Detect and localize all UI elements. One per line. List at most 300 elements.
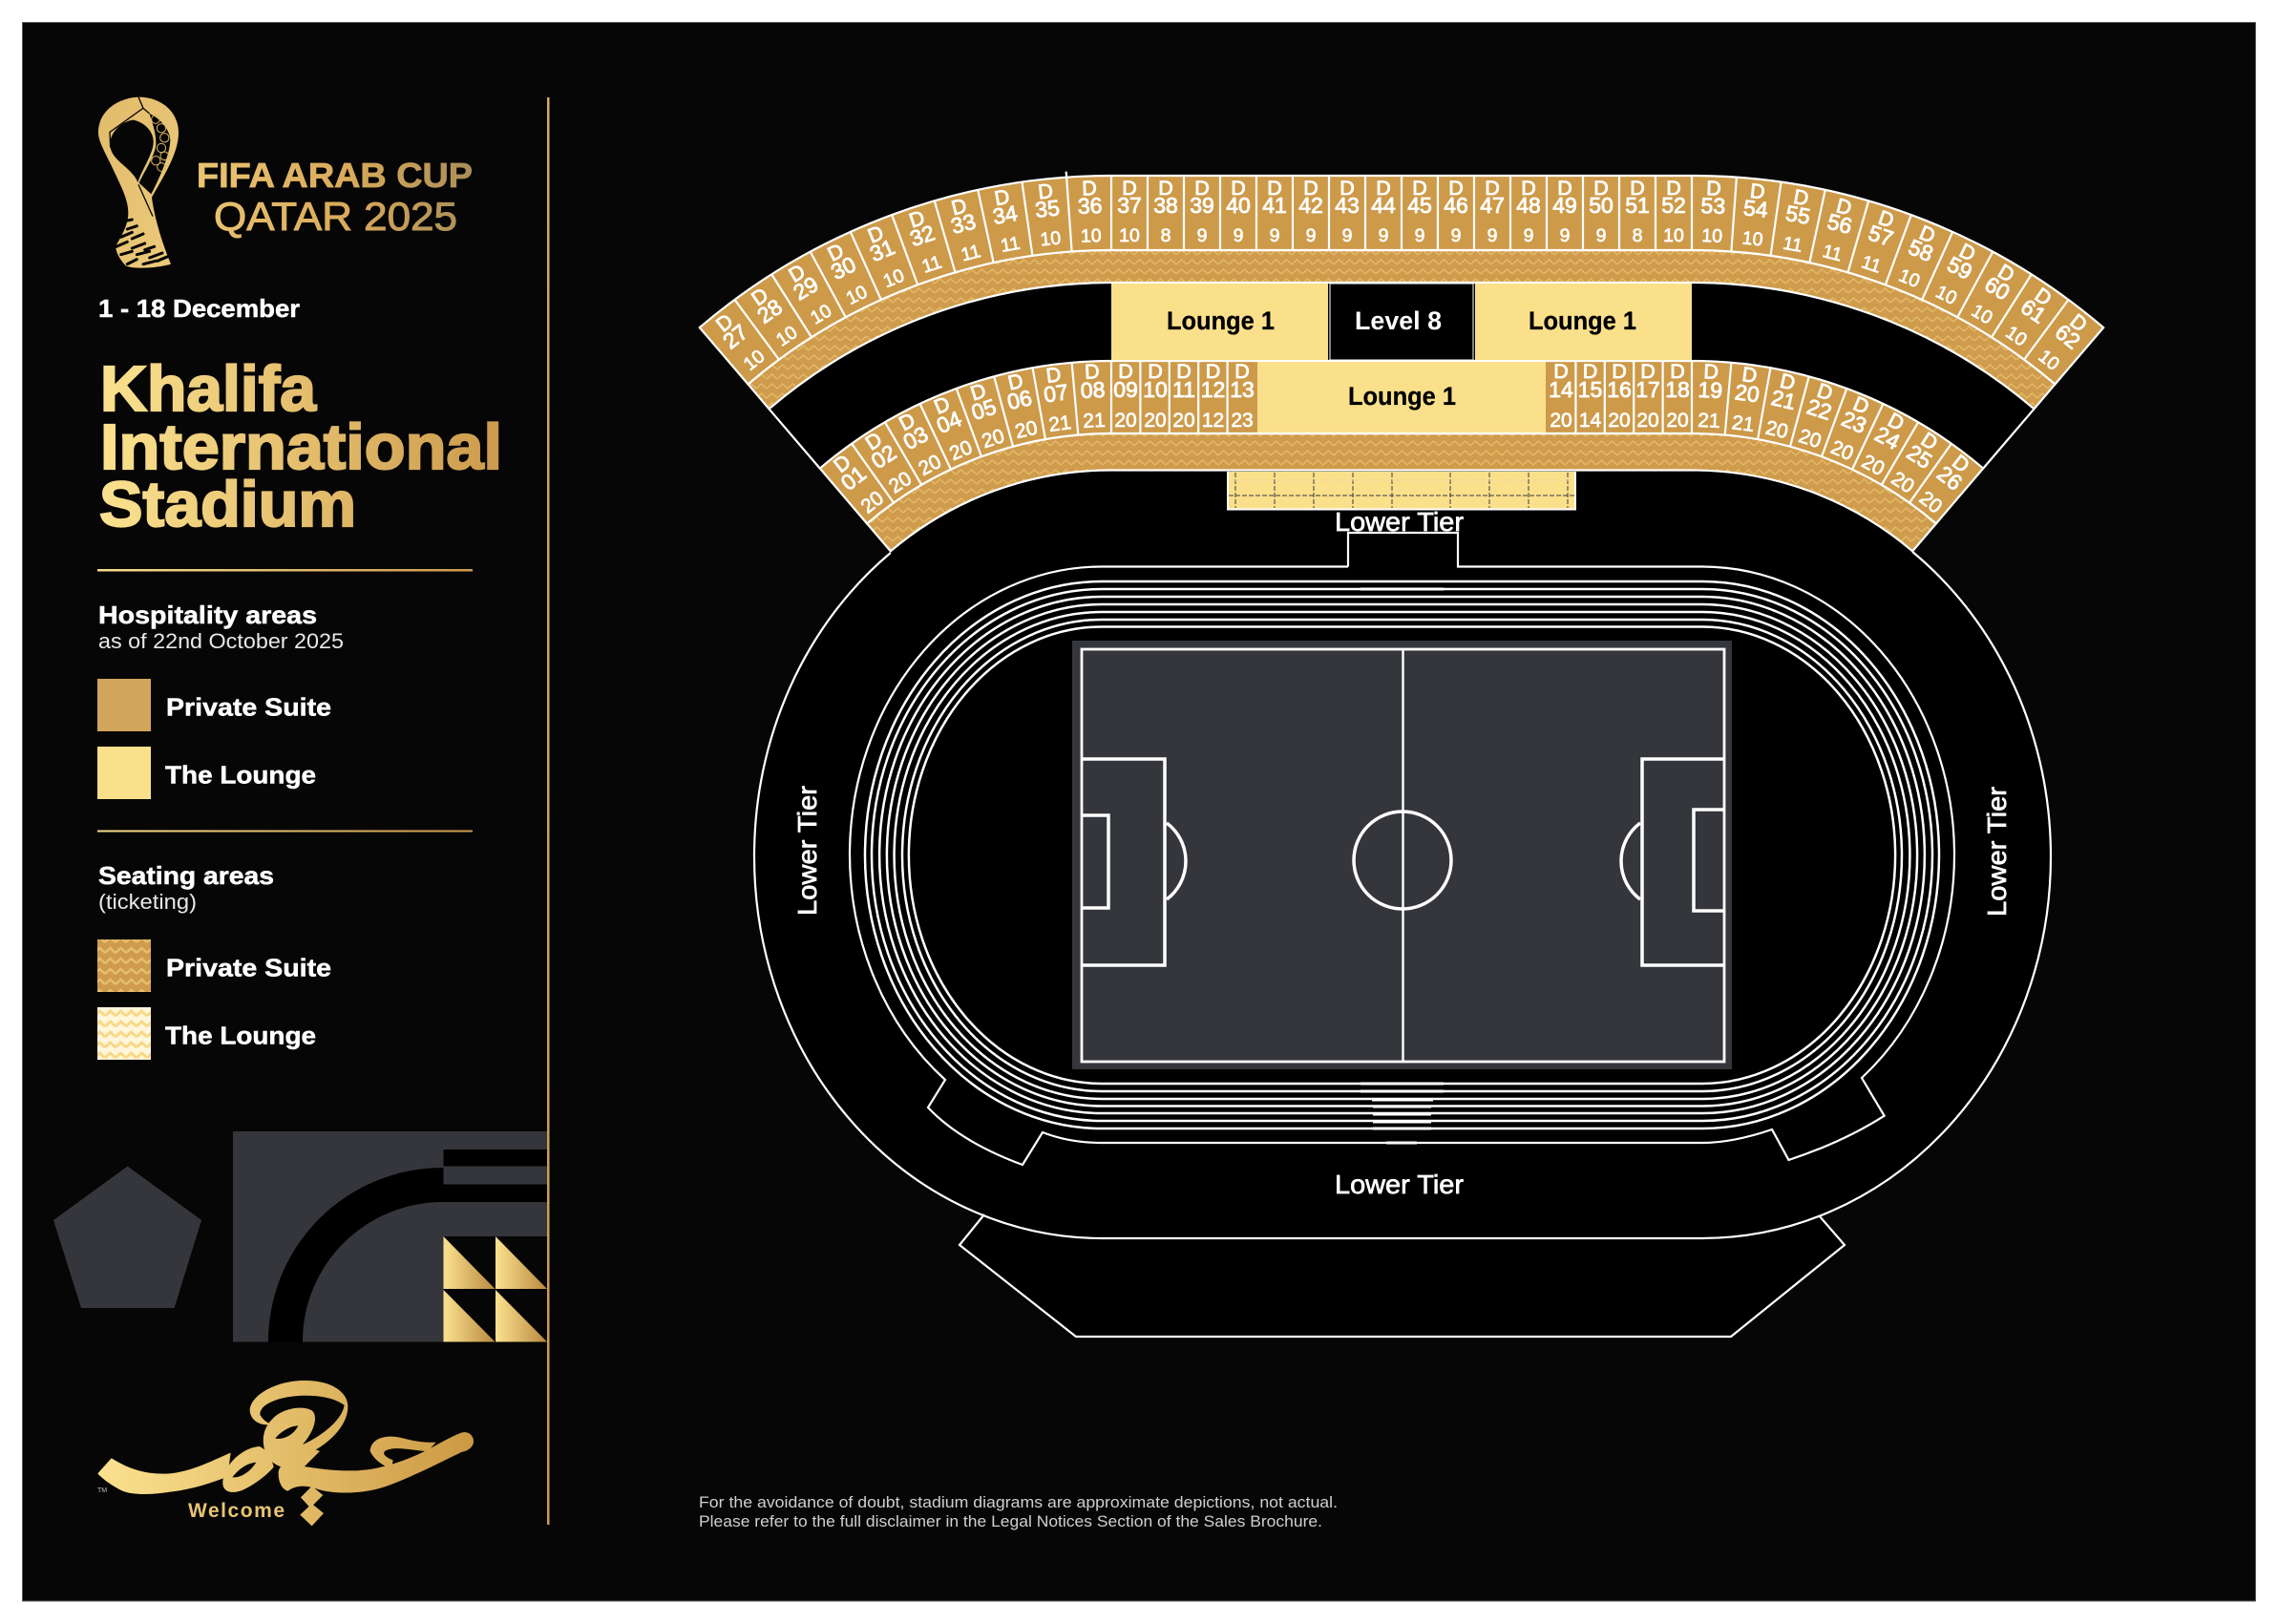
section D04: D (931, 392, 953, 419)
section D37: 37 (1117, 193, 1142, 218)
section D03: D (896, 409, 919, 435)
section D30: 10 (843, 282, 871, 309)
section D32 (901, 204, 947, 279)
section D19: D (1703, 360, 1719, 384)
stand edge lines (770, 409, 2034, 469)
section D28: 10 (772, 322, 802, 350)
section D49: D (1557, 177, 1572, 200)
section D46: 9 (1451, 225, 1461, 246)
section D52: 52 (1661, 193, 1686, 218)
section D62 (2033, 306, 2096, 376)
section D36: 10 (1081, 225, 1102, 247)
section D08 (1079, 360, 1107, 432)
icon: welcome calligraphy (97, 1381, 474, 1526)
section D06: 06 (1005, 385, 1034, 414)
section D17: 20 (1636, 410, 1659, 432)
icon: FIFA Arab Cup trophy (98, 97, 179, 268)
section D07: 07 (1043, 379, 1069, 407)
section D52 (1661, 177, 1686, 246)
section D02: 02 (867, 439, 900, 474)
label: lower tier north: Lower Tier (1335, 507, 1464, 537)
section D01 (826, 447, 889, 518)
section D31 (860, 220, 909, 293)
section D36: 36 (1077, 193, 1103, 219)
section D25 (1887, 425, 1946, 498)
section D48 (1516, 177, 1541, 246)
section D58: 58 (1905, 234, 1937, 266)
section D23 (1826, 390, 1877, 466)
heading: seating areas: Seating areas (98, 861, 274, 890)
section D19 (1697, 360, 1724, 432)
section D40: D (1231, 177, 1246, 200)
section D55: 55 (1783, 200, 1812, 229)
section D45: 45 (1407, 193, 1432, 218)
section D34: 34 (991, 200, 1020, 229)
section D50: 9 (1596, 225, 1606, 246)
section D15: 15 (1578, 377, 1602, 402)
section D30 (820, 237, 873, 310)
section D16: 16 (1607, 377, 1632, 402)
section D31: 10 (880, 265, 908, 292)
section D07 (1040, 362, 1073, 436)
lower row suites (826, 360, 1977, 518)
section D13: 23 (1231, 410, 1254, 432)
section D37 (1117, 177, 1142, 246)
section D56 (1818, 193, 1859, 266)
legend: hospitality private suite: Private Suite (166, 693, 331, 722)
section D57: 11 (1859, 252, 1884, 278)
section D51: 51 (1625, 193, 1650, 218)
section D14: 20 (1550, 410, 1572, 432)
section D55 (1779, 184, 1815, 257)
section D24: 24 (1871, 421, 1905, 454)
section D10: D (1148, 360, 1163, 383)
section D04 (926, 390, 977, 466)
level 8 (1330, 284, 1473, 360)
stadium title: Stadium (99, 469, 356, 540)
section D33: 11 (959, 241, 982, 265)
private suite seating band upper (749, 250, 2055, 409)
section D50 (1589, 177, 1614, 246)
section D11: 20 (1172, 410, 1195, 432)
section D21 (1762, 369, 1802, 443)
section D49: 9 (1560, 225, 1570, 246)
section D20: 20 (1734, 379, 1761, 407)
section D53: D (1706, 177, 1721, 200)
welcome caption: Welcome (188, 1500, 285, 1522)
section D05: D (968, 379, 989, 405)
section D62: D (2065, 309, 2092, 337)
section D41: 9 (1270, 225, 1279, 246)
section D51: D (1630, 177, 1645, 200)
section D35: 35 (1034, 195, 1061, 222)
section D04: 20 (946, 436, 976, 465)
section D18: 20 (1666, 410, 1689, 432)
legend: seating private suite: Private Suite (166, 953, 331, 981)
section D27: D (711, 309, 738, 337)
section D32: 11 (919, 252, 944, 278)
section D13: D (1234, 360, 1250, 383)
section D38: D (1158, 177, 1173, 200)
section D20: D (1740, 363, 1759, 388)
section D37: 10 (1119, 225, 1140, 246)
section D47: 47 (1480, 193, 1505, 218)
section D01: 20 (857, 487, 888, 518)
hospitality date note: as of 22nd October 2025 (98, 629, 344, 653)
section D44: 9 (1379, 225, 1388, 246)
section D09: D (1118, 360, 1133, 383)
section D41 (1262, 177, 1287, 246)
lower suite ring (820, 361, 1983, 523)
section D27: 27 (718, 319, 752, 354)
section D24: D (1884, 409, 1908, 435)
section D21: 20 (1763, 417, 1790, 443)
section D13 (1230, 360, 1255, 432)
section D45: 9 (1415, 225, 1424, 246)
section D06: D (1005, 369, 1025, 395)
section D12: 12 (1201, 377, 1225, 402)
section D38: 38 (1153, 193, 1178, 218)
stadium title: International (100, 411, 502, 483)
section D40 (1226, 177, 1251, 246)
section D34 (988, 184, 1024, 257)
section D39: 39 (1190, 193, 1214, 218)
section D33: D (949, 194, 969, 220)
section D36: D (1082, 177, 1097, 200)
section D01: 01 (836, 461, 871, 496)
section D44 (1371, 177, 1396, 246)
section D56: 56 (1825, 209, 1855, 239)
section D60 (1966, 258, 2022, 329)
thicker lane segments at the track centre line (1360, 589, 1444, 1143)
section D62: 62 (2051, 319, 2085, 354)
section D12: D (1206, 360, 1220, 383)
section D05: 20 (980, 425, 1007, 453)
section D26 (1914, 447, 1977, 518)
section D52: D (1666, 177, 1681, 200)
stadium title: Khalifa (100, 353, 317, 425)
label: lower tier south: Lower Tier (1335, 1170, 1464, 1199)
section D25: 20 (1888, 468, 1918, 498)
section D41: D (1267, 177, 1282, 200)
running track lanes (865, 581, 1939, 1128)
section D14: 14 (1549, 377, 1573, 402)
section D48: D (1521, 177, 1536, 200)
legend: seating private suite (97, 939, 331, 992)
section D25: D (1917, 428, 1942, 455)
section D10 (1143, 360, 1168, 432)
section D29: 10 (807, 300, 835, 328)
section D58 (1894, 220, 1943, 293)
sidebar vertical rule (547, 97, 550, 1525)
section D19: 19 (1698, 377, 1723, 403)
section D57 (1856, 204, 1902, 279)
section D11: 11 (1172, 377, 1195, 402)
disclaimer (699, 1494, 1338, 1530)
section D61 (2000, 281, 2059, 352)
section D34: D (993, 185, 1011, 210)
section D14: D (1553, 360, 1569, 383)
section D21: D (1778, 369, 1798, 395)
section D49: 49 (1552, 193, 1577, 218)
section D51: 8 (1633, 225, 1642, 246)
section D61: 61 (2016, 294, 2051, 328)
section D34: 11 (999, 233, 1022, 257)
section D20: 21 (1731, 411, 1756, 436)
section D56: 11 (1821, 241, 1845, 265)
section D09: 09 (1113, 377, 1138, 402)
section D09: 20 (1114, 410, 1137, 432)
section D45 (1407, 177, 1432, 246)
section D54: 10 (1741, 227, 1764, 250)
lounge 1 lower (1257, 362, 1546, 432)
section D53: 10 (1701, 225, 1723, 247)
section D48: 48 (1516, 193, 1541, 218)
section D05: 05 (968, 393, 1000, 425)
section D46: D (1448, 177, 1464, 200)
label: lower tier east: Lower Tier (1982, 787, 2012, 917)
section D59: D (1955, 239, 1979, 266)
section D49 (1552, 177, 1577, 246)
section D18: 18 (1665, 377, 1690, 402)
section D17 (1635, 360, 1660, 432)
section D43 (1335, 177, 1360, 246)
section D27: 10 (740, 346, 770, 375)
section D45: D (1412, 177, 1427, 200)
level 8: Level 8 (1355, 306, 1442, 335)
section D59 (1930, 237, 1983, 310)
lower tier south stand (960, 1214, 1845, 1337)
lounge 1 upper left: Lounge 1 (1167, 306, 1275, 335)
section D53 (1699, 177, 1726, 247)
section D29: 29 (789, 271, 823, 306)
left sidebar (53, 97, 547, 1526)
section D60: D (1993, 260, 2018, 287)
section D14 (1549, 360, 1573, 432)
section D10: 10 (1143, 377, 1168, 402)
section D23: D (1850, 392, 1872, 419)
section D23: 20 (1827, 436, 1857, 465)
section D21: 21 (1769, 385, 1798, 414)
section D36 (1077, 177, 1104, 247)
disclaimer: For the avoidance of doubt, stadium diagrams are approximate depictions, not actual. (699, 1494, 1338, 1511)
section D32: D (906, 206, 928, 232)
section D02: 20 (885, 468, 916, 498)
section D43: 43 (1335, 193, 1360, 218)
section D57: D (1875, 206, 1897, 232)
section D04: 04 (933, 406, 965, 438)
lounge 1 lower: Lounge 1 (1348, 382, 1456, 411)
section D29 (781, 258, 837, 329)
section D58: D (1916, 221, 1938, 248)
section D39: D (1194, 177, 1210, 200)
section D50: D (1593, 177, 1609, 200)
section D24 (1857, 406, 1912, 481)
section D41: 41 (1262, 193, 1287, 218)
logo wordmark: Qatar 2025: QATAR 2025 (214, 194, 457, 239)
logo wordmark: FIFA Arab Cup: FIFA ARAB CUP (197, 156, 473, 195)
section D51 (1625, 177, 1650, 246)
section D27 (707, 306, 770, 376)
section D16 (1607, 360, 1632, 432)
section D12: 12 (1202, 410, 1224, 432)
section D40: 9 (1234, 225, 1243, 246)
section D46: 46 (1444, 193, 1468, 218)
section D38: 8 (1161, 225, 1171, 246)
section D62: 10 (2035, 346, 2063, 375)
section D58: 10 (1896, 265, 1923, 292)
section D55: D (1792, 185, 1810, 210)
section D28 (744, 281, 803, 352)
section D53: 53 (1700, 193, 1726, 219)
section D31: D (865, 221, 887, 248)
section D54: D (1749, 179, 1766, 203)
heading: hospitality areas: Hospitality areas (98, 601, 317, 629)
section D44: D (1376, 177, 1391, 200)
section D30: D (824, 239, 848, 266)
disclaimer: Please refer to the full disclaimer in the Legal Notices Section of the Sales Brochure. (699, 1513, 1322, 1530)
section D07: 21 (1047, 411, 1072, 436)
private suite seating band lower (867, 433, 1936, 551)
legend: hospitality the lounge: The Lounge (165, 760, 316, 789)
section D16: 20 (1608, 410, 1631, 432)
upper row suites (707, 177, 2096, 376)
track outer wall (850, 533, 1954, 1165)
section D47: 9 (1487, 225, 1497, 246)
section D10: 20 (1144, 410, 1167, 432)
lounge seating block (1228, 472, 1575, 510)
section D18: D (1670, 360, 1685, 383)
suite dividers (735, 172, 2068, 503)
section D32: 32 (907, 220, 938, 251)
trademark mark: TM (97, 1487, 107, 1494)
stadium title (99, 353, 502, 540)
section D29: D (785, 260, 810, 287)
section D17: D (1640, 360, 1656, 383)
section D47: D (1485, 177, 1500, 200)
lounge 1 upper left (1111, 284, 1328, 360)
section D31: 31 (866, 234, 898, 266)
section D06 (1002, 369, 1041, 443)
section D35 (1032, 179, 1064, 251)
section D37: D (1122, 177, 1137, 200)
section D03: 20 (915, 451, 945, 480)
section D40: 40 (1226, 193, 1251, 218)
section D42: 9 (1306, 225, 1316, 246)
section D15: D (1583, 360, 1597, 383)
section D35: D (1037, 179, 1054, 203)
section D61: 10 (2002, 322, 2031, 351)
section D42: 42 (1298, 193, 1323, 218)
section D42: D (1303, 177, 1318, 200)
south stand outline (960, 1214, 1845, 1337)
section D13: 13 (1230, 377, 1255, 402)
section D28: D (748, 284, 772, 310)
section D39 (1190, 177, 1214, 246)
section D22: 22 (1803, 393, 1835, 425)
legend: seating the lounge: The Lounge (165, 1022, 316, 1050)
section D50: 50 (1589, 193, 1614, 218)
section D11 (1172, 360, 1195, 432)
section D06: 20 (1013, 417, 1040, 443)
upper suite ring (700, 176, 2103, 384)
section D52: 10 (1663, 225, 1684, 246)
section D22: 20 (1796, 425, 1824, 453)
label: lower tier west: Lower Tier (792, 786, 822, 916)
section D20 (1730, 362, 1763, 436)
section D11: D (1176, 360, 1192, 383)
section D38 (1153, 177, 1178, 246)
section D26: 26 (1932, 461, 1967, 496)
section D16: D (1612, 360, 1627, 383)
section D24: 20 (1858, 451, 1888, 480)
section D60: 10 (1968, 301, 1996, 329)
section D33: 33 (948, 209, 979, 239)
section D43: D (1339, 177, 1355, 200)
section D42 (1298, 177, 1323, 246)
decoration: geometric block (233, 1131, 547, 1342)
section D22: D (1814, 379, 1835, 405)
stadium black ground (700, 176, 2103, 1238)
football pitch (1072, 641, 1732, 1069)
stadium outer oval (754, 552, 2051, 1238)
section D15: 14 (1579, 410, 1601, 432)
section D08: D (1084, 360, 1100, 384)
section D39: 9 (1197, 225, 1207, 246)
section D28: 28 (752, 294, 787, 328)
section D19: 21 (1698, 410, 1720, 432)
section D09 (1113, 360, 1138, 432)
seating note: (ticketing) (98, 890, 197, 914)
section D54 (1740, 179, 1771, 251)
section D02: D (861, 428, 886, 455)
section D56: D (1834, 194, 1854, 220)
section D47 (1480, 177, 1505, 246)
section D03: 03 (899, 421, 932, 454)
section D17: 17 (1635, 377, 1660, 402)
section D61: D (2031, 284, 2056, 310)
event dates: 1 - 18 December (98, 294, 300, 323)
section D44: 44 (1371, 193, 1396, 218)
section D05 (963, 377, 1008, 453)
section D59: 59 (1943, 251, 1976, 285)
stadium map (700, 172, 2103, 1337)
legend: seating the lounge (97, 1007, 316, 1060)
lounge 1 upper right (1475, 284, 1692, 360)
section D01: D (830, 450, 855, 477)
section D48: 9 (1524, 225, 1533, 246)
section D26: 20 (1915, 487, 1946, 518)
section D46 (1444, 177, 1468, 246)
section D33 (944, 193, 985, 266)
section D25: 25 (1903, 439, 1936, 474)
legend: hospitality the lounge (97, 747, 316, 799)
section D57: 57 (1866, 220, 1896, 251)
section D30: 30 (827, 251, 860, 285)
section D15 (1578, 360, 1602, 432)
section D07: D (1044, 363, 1063, 388)
section D35: 10 (1039, 227, 1062, 250)
section D02 (857, 425, 917, 498)
section D26: D (1948, 450, 1973, 477)
section D54: 54 (1742, 195, 1769, 222)
section D43: 9 (1342, 225, 1352, 246)
section D23: 23 (1838, 406, 1870, 438)
legend: hospitality private suite (97, 679, 331, 731)
section D18 (1665, 360, 1690, 432)
section D08: 21 (1083, 410, 1106, 432)
section D55: 11 (1782, 233, 1804, 257)
